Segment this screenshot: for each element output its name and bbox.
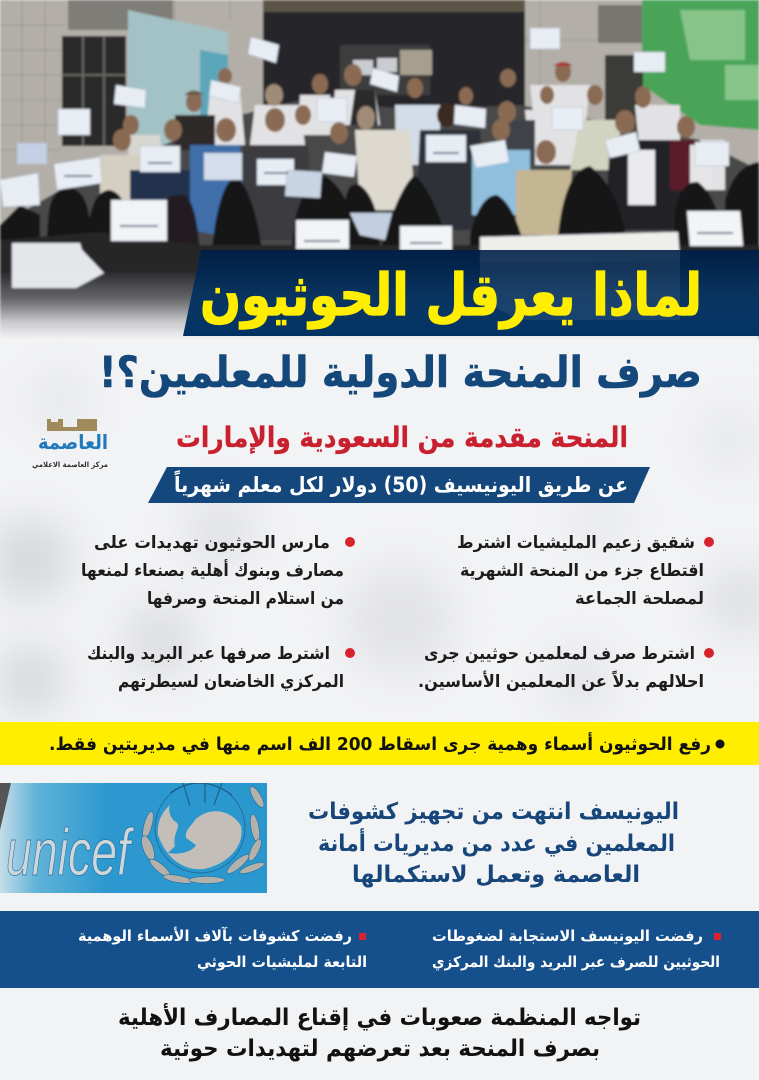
- central doorway: [263, 0, 525, 12]
- women in black: [0, 162, 759, 340]
- closing statement: بصرف المنحة بعد تعرضهم لتهديدات حوثية: [160, 1036, 600, 1062]
- bullet: right column bottom: احلالهم بدلاً عن المعلمين الأساسين.: [418, 670, 704, 692]
- men back row: [100, 85, 725, 240]
- bullet: right column bottom: [418, 644, 714, 692]
- logo: Al-Asimah media center: العاصمة: [38, 430, 108, 454]
- UNICEF statement: [308, 799, 679, 888]
- bullet: right column top: لمصلحة الجماعة: [575, 589, 704, 609]
- logo: Al-Asimah media center: [32, 419, 108, 469]
- photo: UNICEF sign: [0, 783, 267, 893]
- title banner: [183, 250, 759, 336]
- bullet: right column top: شقيق زعيم المليشيات اشترط: [457, 533, 695, 553]
- refusal: right: رفضت اليونيسف الاستجابة لضغوطات: [432, 927, 703, 945]
- protest placards: [0, 28, 743, 288]
- bullet: left column top: مارس الحوثيون تهديدات على: [94, 533, 330, 553]
- subtitle: صرف المنحة الدولية للمعلمين؟!: [99, 348, 702, 398]
- closing statement: [118, 1002, 641, 1062]
- icon: UNICEF emblem: [139, 783, 266, 885]
- UNICEF statement: المعلمين في عدد من مديريات أمانة: [318, 827, 675, 857]
- closing statement: تواجه المنظمة صعوبات في إقناع المصارف الأهلية: [118, 1002, 641, 1031]
- UNICEF statement: العاصمة وتعمل لاستكمالها: [352, 862, 640, 888]
- building wall: [0, 0, 759, 340]
- bullet: right column bottom: اشترط صرف لمعلمين حوثيين جرى: [424, 644, 695, 664]
- yellow strip: fake names: رفع الحوثيون أسماء وهمية جرى اسقاط 200 الف اسم منها في مديريتين فقط.: [49, 732, 711, 755]
- dark window: [62, 36, 126, 146]
- navy ribbon: grant amount: عن طريق اليونيسيف (50) دولار لكل معلم شهرياً: [174, 469, 628, 497]
- bullet: left column bottom: المركزي الخاضعان لسيطرتهم: [118, 672, 344, 692]
- faint sign behind banner: [480, 250, 680, 320]
- heads: [113, 62, 695, 164]
- bullet: right column top: اقتطاع جزء من المنحة الشهرية: [460, 561, 704, 581]
- crowd dark base: [0, 100, 759, 340]
- bullet: left column bottom: [87, 644, 355, 692]
- bullet: left column top: مصارف وبنوك أهلية بصنعاء لمنعها: [81, 559, 344, 581]
- refusal: left: التابعة لمليشيات الحوثي: [197, 953, 367, 971]
- bullet: left column top: [81, 533, 355, 609]
- bottom fade: [0, 270, 759, 340]
- blue panel: UNICEF refusals: [0, 911, 759, 988]
- photo: UNICEF sign: unicef: [6, 815, 135, 889]
- logo: Al-Asimah media center: مركز العاصمة الاعلامي: [32, 460, 108, 469]
- refusal: left: رفضت كشوفات بآلاف الأسماء الوهمية: [78, 927, 352, 945]
- refusal: right: [432, 927, 721, 972]
- navy ribbon: grant amount: [148, 467, 650, 503]
- yellow strip: fake names: [0, 722, 759, 765]
- notice board: [128, 10, 228, 150]
- green sign: [642, 0, 759, 130]
- UNICEF statement: اليونيسف انتهت من تجهيز كشوفات: [308, 799, 679, 825]
- refusal: right: الحوثيين للصرف عبر البريد والبنك المركزي: [432, 953, 720, 972]
- bullet: right column top: [457, 533, 714, 609]
- icon: castle skyline: [47, 419, 97, 431]
- header photo: teachers protesting: [0, 0, 759, 340]
- lattice window top: [68, 0, 173, 30]
- bullet: left column top: من استلام المنحة وصرفها: [147, 589, 344, 609]
- refusal: left: [78, 927, 367, 971]
- red heading: grant source: المنحة مقدمة من السعودية والإمارات: [176, 421, 628, 454]
- bullet: left column bottom: اشترط صرفها عبر البريد والبنك: [87, 644, 330, 664]
